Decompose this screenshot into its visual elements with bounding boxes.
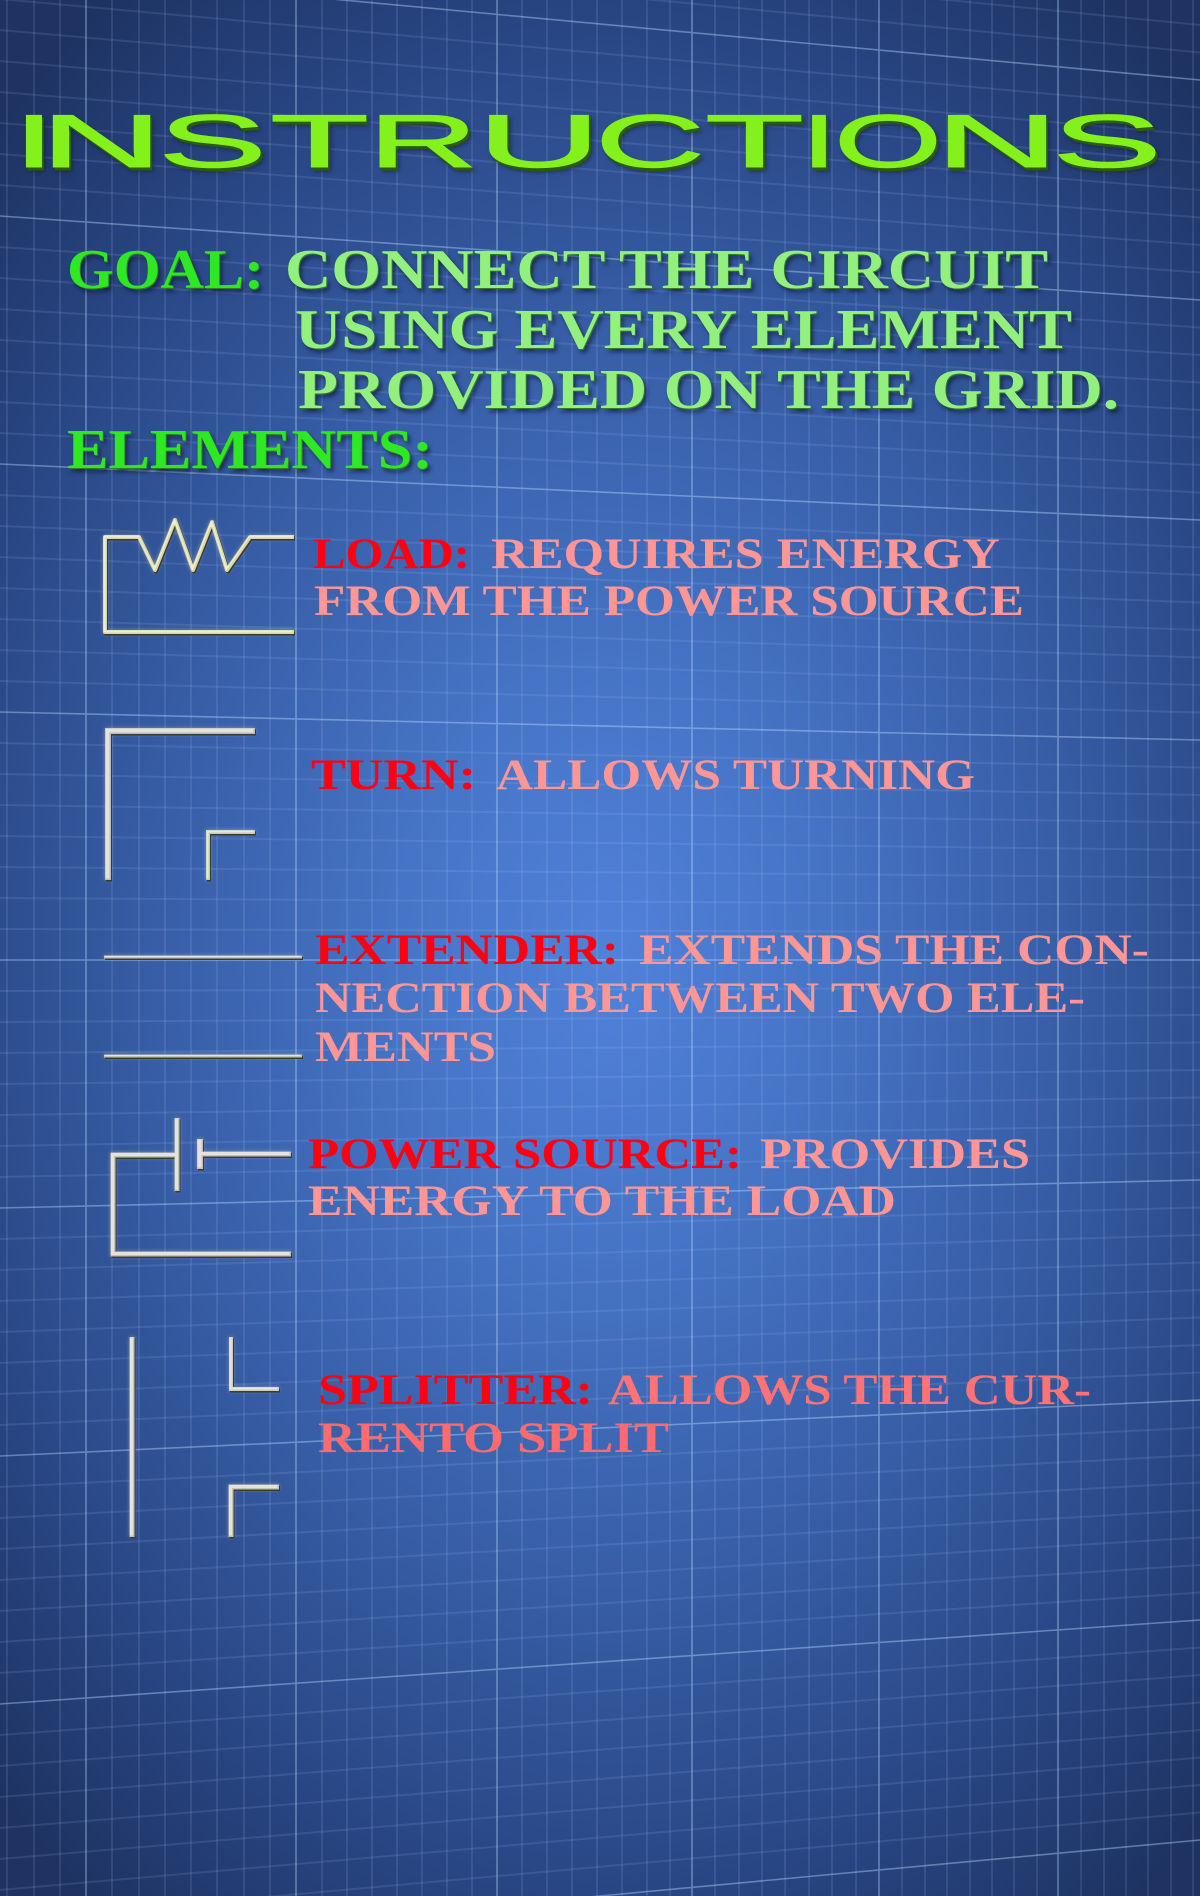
extender line 1: EXTENDS THE CON- — [639, 927, 1149, 974]
splitter line 2: RENTO SPLIT — [318, 1415, 669, 1462]
turn label: TURN: — [311, 752, 476, 799]
extender line 3: MENTS — [315, 1024, 496, 1071]
power source line 1: PROVIDES — [760, 1131, 1030, 1178]
icon: turn pieces — [108, 731, 255, 880]
title — [13, 99, 1162, 183]
load text line 2: FROM THE POWER SOURCE — [314, 578, 1024, 625]
load text line 1: REQUIRES ENERGY — [491, 531, 1000, 578]
icon: load resistor — [105, 520, 294, 632]
load description — [313, 531, 1024, 625]
power source line 2: ENERGY TO THE LOAD — [308, 1178, 896, 1225]
title: S — [158, 99, 267, 183]
title: C — [595, 99, 705, 183]
title: T — [270, 99, 369, 183]
icon: power source battery — [113, 1118, 291, 1254]
extender description — [315, 927, 1149, 1071]
title: U — [477, 99, 601, 183]
goal line 2: USING EVERY ELEMENT — [295, 299, 1072, 361]
title: I — [801, 99, 837, 183]
icon: splitter pieces — [132, 1337, 279, 1537]
extender label: EXTENDER: — [315, 927, 619, 974]
title: T — [705, 99, 804, 183]
title: I — [13, 99, 55, 183]
turn text: ALLOWS TURNING — [496, 752, 975, 799]
elements heading: ELEMENTS: — [67, 419, 433, 481]
title: S — [1052, 99, 1162, 183]
goal line 3: PROVIDED ON THE GRID. — [298, 359, 1119, 421]
title: N — [935, 99, 1059, 183]
splitter line 1: ALLOWS THE CUR- — [608, 1367, 1091, 1414]
splitter description — [318, 1367, 1091, 1462]
load label: LOAD: — [313, 531, 470, 578]
title: N — [40, 99, 163, 183]
power source label: POWER SOURCE: — [308, 1131, 742, 1178]
goal line 1: CONNECT THE CIRCUIT — [285, 239, 1048, 301]
goal label: GOAL: — [67, 239, 264, 301]
power source description — [308, 1131, 1030, 1225]
goal text block — [67, 239, 1119, 481]
title: O — [834, 99, 942, 183]
title: R — [368, 99, 478, 183]
icon: extender pieces — [104, 957, 302, 1056]
turn description — [311, 752, 975, 799]
extender line 2: NECTION BETWEEN TWO ELE- — [315, 975, 1085, 1022]
splitter label: SPLITTER: — [318, 1367, 593, 1414]
